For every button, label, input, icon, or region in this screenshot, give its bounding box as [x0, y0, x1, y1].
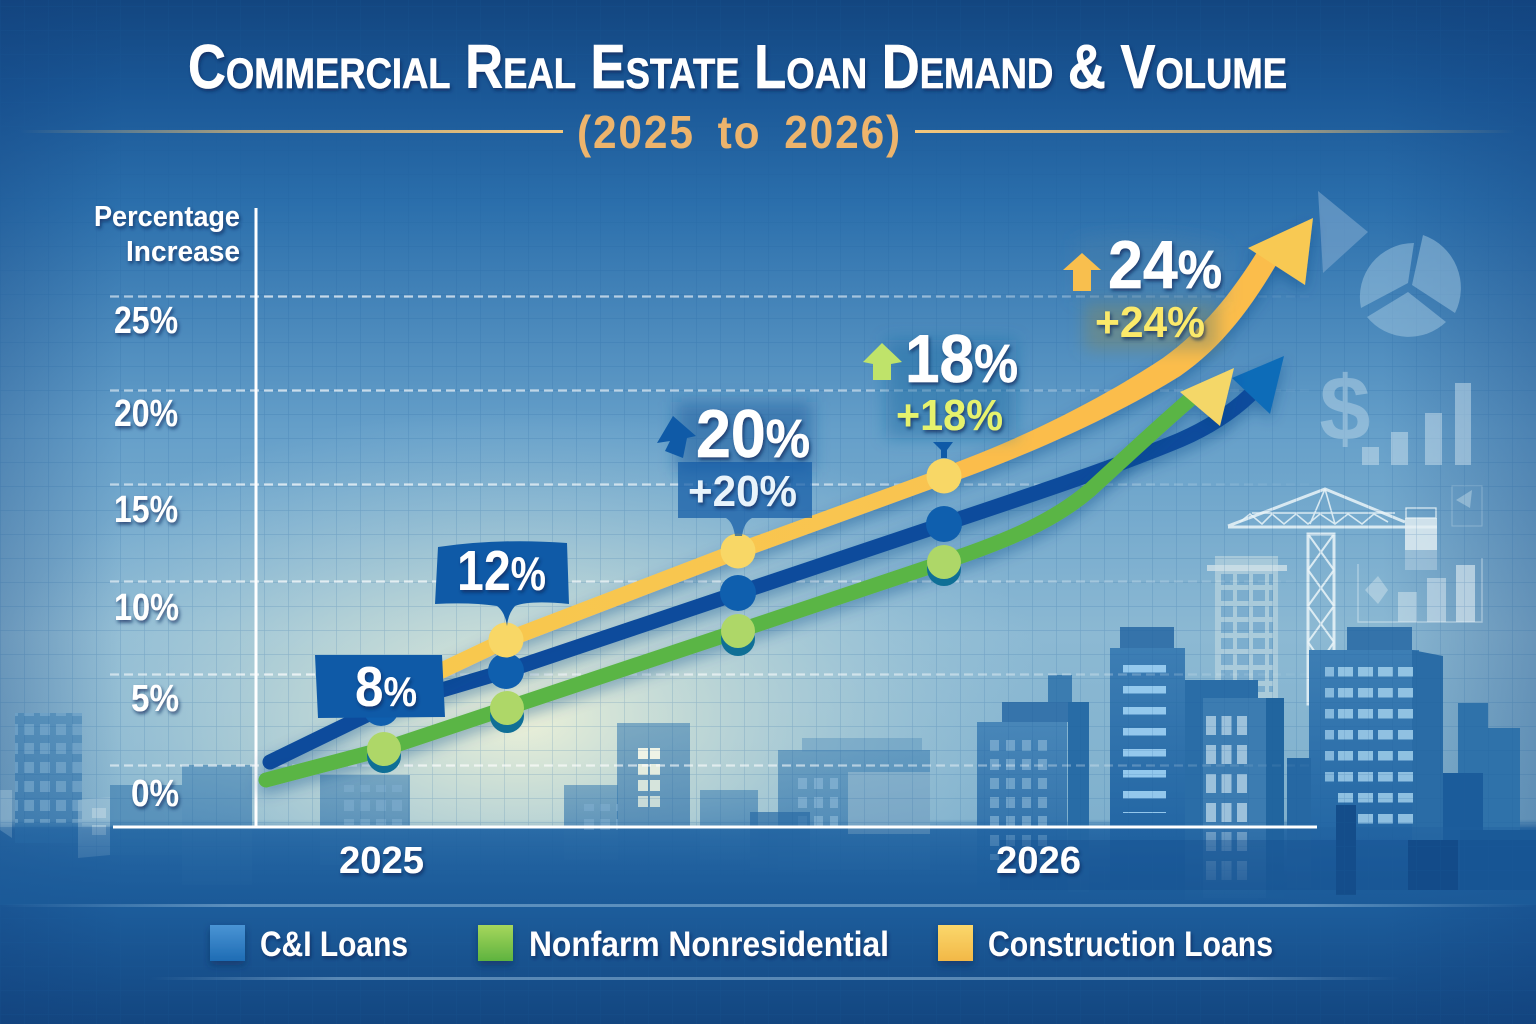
y axis labels: 5% [131, 678, 179, 720]
data markers [363, 458, 962, 773]
y axis labels [114, 300, 179, 815]
icon: dollar sign and bars: $ [1319, 358, 1371, 460]
background skyline [0, 486, 1536, 905]
blue markers [363, 506, 962, 726]
icon: green up arrow [863, 343, 902, 380]
subtitle with rules [20, 106, 1515, 158]
icon: yellow up arrow [1063, 253, 1101, 291]
callout: 18% [863, 321, 1018, 458]
callout: 8% [315, 655, 445, 719]
x axis labels [339, 840, 1081, 882]
small ghost bar chart [1358, 486, 1482, 622]
title: Commercial Real Estate Loan Demand & Volume [188, 33, 1287, 102]
icon: pie chart [1360, 235, 1461, 337]
y axis labels: 25% [114, 300, 178, 342]
legend: Nonfarm Nonresidential: Nonfarm Nonresidential [529, 925, 889, 964]
subtitle with rules: (2025 to 2026) [577, 106, 902, 158]
series: C&I Loans line [270, 356, 1284, 762]
y axis labels: 10% [114, 587, 179, 629]
foreground building C [1309, 627, 1443, 900]
horizontal dashed gridlines [110, 296, 1310, 766]
middle buildings [564, 723, 930, 872]
legend: C&I Loans: C&I Loans [260, 925, 408, 964]
callout: 12% [435, 539, 569, 626]
x axis labels: 2026 [996, 840, 1081, 882]
right and lower silhouettes [0, 703, 1536, 905]
y axis labels: 15% [114, 489, 178, 531]
y axis labels: 20% [114, 393, 178, 435]
callout: 8%: 8% [355, 655, 417, 719]
icon: blue up arrow [657, 416, 696, 458]
callout: 24% [1063, 227, 1225, 350]
callout: 18%: +18% [896, 391, 1003, 440]
foreground building B [1110, 627, 1284, 900]
left buildings [0, 713, 410, 885]
legend band [0, 904, 1536, 980]
series: Construction Loans line [430, 218, 1313, 676]
callout: 20%: 20% [696, 396, 810, 472]
far pale tower [1207, 556, 1287, 706]
legend: Construction Loans: Construction Loans [988, 925, 1273, 964]
callout: 24%: +24% [1095, 298, 1205, 347]
x axis labels: 2025 [339, 840, 424, 882]
foreground building A [977, 675, 1089, 892]
callout: 18%: 18% [905, 321, 1018, 397]
y axis labels: 0% [131, 773, 179, 815]
y axis title: Percentage [94, 201, 240, 233]
callout: 20%: +20% [688, 467, 797, 516]
y axis title [94, 201, 240, 268]
callout: 20% [657, 396, 812, 536]
legend: C&I Loans [210, 925, 408, 964]
callout: 12%: 12% [457, 539, 546, 603]
icon: construction crane [1228, 489, 1437, 704]
icon: ghost arrow [1318, 191, 1368, 273]
chart axes [113, 208, 1317, 828]
callout: 24%: 24% [1108, 227, 1222, 303]
icon: dollar sign and bars [1319, 358, 1471, 465]
green markers [367, 545, 961, 773]
series: Nonfarm Nonresidential line [266, 368, 1234, 780]
y axis title: Increase [126, 236, 240, 268]
yellow markers [488, 458, 962, 658]
